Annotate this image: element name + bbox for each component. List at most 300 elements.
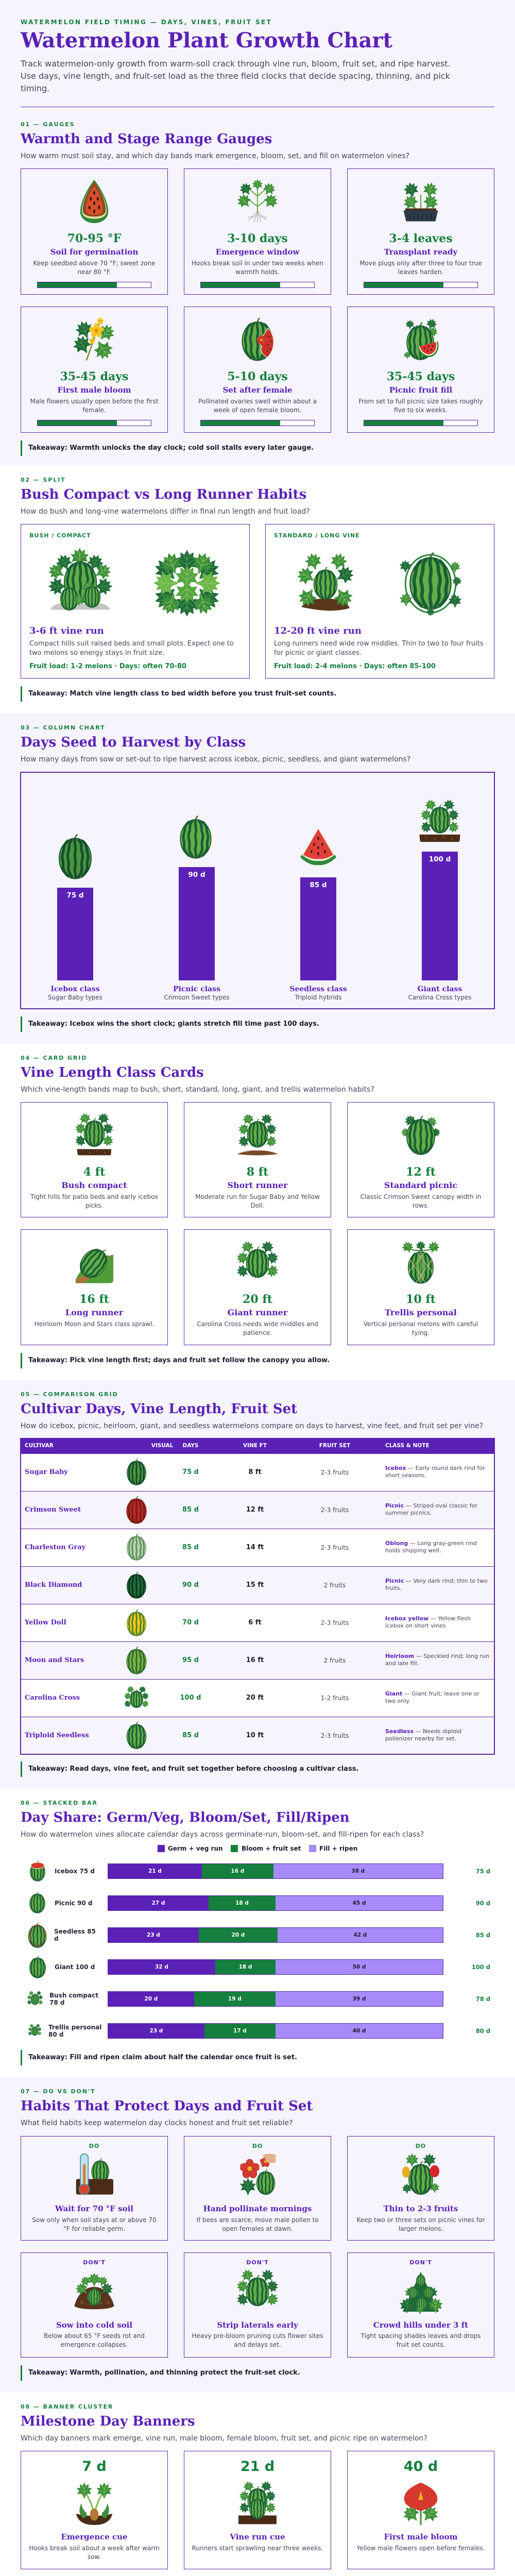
takeaway: Takeaway: Warmth unlocks the day clock; cold soil stalls every later gauge. (28, 444, 314, 452)
banner: 7 d (21, 2451, 168, 2569)
name: Standard picnic (384, 1180, 457, 1190)
section heading: 07 — DO VS DON'T (21, 2088, 96, 2095)
tag: DON'T (409, 2259, 432, 2266)
label: Emergence window (216, 247, 299, 257)
description: larger melons. (399, 2225, 443, 2232)
description (358, 398, 483, 414)
section heading: 03 — COLUMN CHART (21, 724, 105, 731)
section heading: Vine Length Class Cards (21, 1065, 204, 1080)
icon: melon and slice (404, 318, 439, 360)
label: Set after female (222, 385, 293, 395)
thumbnail (123, 1686, 150, 1711)
thumbnail (124, 1722, 149, 1749)
stacked row: Bush: 78 d (49, 1999, 64, 2006)
tag: BUSH / COMPACT (29, 532, 91, 539)
row: Sugar Baby (21, 1454, 494, 1492)
legend: Bloom + fruit set (242, 1845, 301, 1852)
stacked row: Bush: 20 d (144, 1996, 158, 2002)
tag: DON'T (83, 2259, 106, 2266)
icon: oval melon in vine ring (400, 552, 461, 616)
row: Yellow Doll: 70 d (182, 1619, 199, 1626)
name: Trellis personal (385, 1308, 457, 1317)
description: Keep seedbed above 70 °F; sweet zone (33, 260, 155, 267)
fruit load: Fruit load: 1-2 melons · Days: often 70-80 (29, 663, 186, 670)
section heading (21, 724, 410, 764)
gauge card: soil (21, 168, 168, 295)
description: five to six weeks. (394, 406, 448, 414)
row: Black Diamond: 15 ft (246, 1581, 264, 1589)
value: 3-4 leaves (389, 232, 453, 245)
row: Moon and Stars: 2 fruits (324, 1657, 346, 1664)
section heading: 04 — CARD GRID (21, 1055, 87, 1061)
value: 3-10 days (227, 232, 288, 245)
thumbnail: oval melon (27, 1892, 47, 1913)
intro text: timing. (21, 83, 49, 93)
section heading: Habits That Protect Days and Fruit Set (21, 2098, 313, 2114)
bar (179, 867, 215, 980)
icon: crowded pile (399, 2270, 442, 2315)
row: Yellow Doll: icebox on short vines. (385, 1622, 448, 1629)
thumbnail: bush melon (25, 1991, 45, 2007)
day number: 7 d (82, 2459, 107, 2475)
icon: potted transplant (403, 182, 438, 222)
description (29, 640, 234, 657)
row: Sugar Baby: Sugar Baby (25, 1468, 68, 1476)
icon: giant vine melon (237, 1241, 278, 1278)
title: Emergence cue (61, 2532, 128, 2541)
row: Sugar Baby: Icebox — Early round dark rind for (385, 1465, 485, 1471)
value: 35-45 days (387, 370, 455, 383)
icon: melon on slope (75, 1249, 113, 1283)
panel: bush compact (21, 524, 250, 679)
row: Yellow Doll: Icebox yellow — Yellow flesh (385, 1615, 471, 1622)
section 01: gauges (0, 110, 515, 466)
stacked row: Seedless (21, 1923, 494, 1947)
title: Hand pollinate mornings (203, 2204, 312, 2213)
row: Carolina Cross: Carolina Cross (25, 1694, 80, 1702)
gauge card: picnic fill (347, 307, 494, 433)
description: Classic Crimson Sweet canopy width in (360, 1193, 481, 1200)
section heading: 06 — STACKED BAR (21, 1800, 98, 1806)
section 02: split (0, 466, 515, 714)
card: 8 ft (184, 1102, 331, 1217)
icon: sprout in soil (73, 2482, 116, 2525)
bar: 100 d (429, 855, 451, 863)
table header (20, 1438, 495, 1454)
stacked row: Picnic (21, 1891, 494, 1915)
description: female. (82, 406, 106, 414)
row: Moon and Stars (21, 1642, 494, 1680)
stacked row: Icebox: 75 d (476, 1868, 490, 1875)
thumbnail (124, 1459, 149, 1485)
stacked row: Picnic: 27 d (152, 1900, 165, 1906)
column: seedless (289, 829, 347, 1001)
description: Tight hills for patio beds and early icebox (30, 1193, 158, 1200)
gauge bar (37, 282, 151, 288)
icon: long vine on soil (297, 553, 354, 611)
row: Crimson Sweet: 2-3 fruits (321, 1506, 349, 1514)
section heading (21, 1391, 494, 1432)
icon: bush plant with melons (48, 548, 112, 611)
description (348, 2332, 494, 2349)
icon: melon (59, 834, 92, 879)
icon: thermometer and melon (73, 2153, 116, 2196)
stacked row: Trellis: 80 d (476, 2027, 490, 2035)
banner: 21 d (184, 2451, 331, 2569)
description: Male flowers usually open before the first (30, 398, 158, 405)
stacked row: Bush: Bush compact (49, 1992, 98, 1999)
stacked row: Seedless: 42 d (353, 1932, 367, 1938)
row: Black Diamond: fruits. (385, 1585, 402, 1591)
row: Triploid Seedless: Seedless — Needs diploid (385, 1728, 461, 1735)
row: Moon and Stars: Moon and Stars (25, 1656, 84, 1664)
row: Crimson Sweet: summer picnics. (385, 1510, 432, 1516)
section heading (21, 1055, 374, 1094)
row: Moon and Stars: 95 d (182, 1656, 199, 1664)
card: thin fruits (347, 2136, 494, 2241)
class name: Icebox class (50, 985, 100, 993)
description (184, 2332, 331, 2349)
description: Yellow male flowers open before females. (356, 2545, 485, 2552)
card: 4 ft (21, 1102, 168, 1217)
description (360, 1193, 481, 1209)
gauge card: fruit set (184, 307, 331, 433)
takeaway: Takeaway: Fill and ripen claim about half the calendar once fruit is set. (28, 2054, 297, 2061)
card: hand pollinate (184, 2136, 331, 2241)
icon: red flower (399, 2482, 442, 2525)
stacked row: Icebox: 21 d (148, 1868, 162, 1874)
description (30, 1193, 158, 1209)
takeaway (21, 686, 494, 702)
stacked row: Trellis: 40 d (353, 2028, 366, 2034)
takeaway (21, 1761, 494, 1777)
stacked row: Giant: 32 d (155, 1964, 168, 1970)
description: Carolina Cross needs wide middles and (197, 1320, 318, 1328)
section heading: 01 — GAUGES (21, 121, 75, 128)
fruit load: Fruit load: 2-4 melons · Days: often 85-100 (274, 663, 436, 670)
gauge bar (364, 420, 478, 426)
description: two melons so energy stays in fruit size. (29, 649, 164, 657)
title: Crowd hills under 3 ft (373, 2320, 468, 2330)
description: Vertical personal melons with careful (364, 1320, 478, 1328)
icon: runner on mulch (237, 1114, 278, 1155)
bar: 75 d (66, 891, 84, 900)
section heading: Bush Compact vs Long Runner Habits (21, 487, 306, 502)
icon: yellow flower vine (73, 317, 114, 361)
description (21, 2216, 167, 2233)
title: Watermelon Plant Growth Chart (21, 28, 392, 53)
icon: melon with small fruits (399, 2153, 442, 2196)
takeaway (21, 440, 494, 456)
tag: DO (89, 2143, 99, 2149)
stacked row: Icebox: 38 d (351, 1868, 365, 1874)
section heading: How do bush and long-vine watermelons differ in final run length and fruit load? (21, 507, 310, 516)
stacked row: Giant: 50 d (353, 1964, 366, 1970)
row: Charleston Gray (21, 1529, 494, 1567)
row: Carolina Cross: 100 d (180, 1694, 201, 1702)
column chart (20, 772, 495, 1009)
legend (158, 1845, 358, 1852)
bar: 85 d (310, 881, 327, 889)
description (30, 398, 159, 414)
section heading (21, 477, 310, 516)
gauge bar (364, 282, 478, 288)
description: Long runners need wide row middles. Thin to two to four fruits (274, 640, 484, 648)
description: Move plugs only after three to four true (359, 260, 482, 267)
section heading: Warmth and Stage Range Gauges (21, 131, 272, 147)
value: 70-95 °F (67, 232, 121, 245)
card: cold soil (21, 2252, 168, 2358)
intro text: Use days, vine length, and fruit-set load as the three field clocks that decide spacing, thinning, and pick (21, 71, 450, 81)
takeaway: Takeaway: Icebox wins the short clock; giants stretch fill time past 100 days. (28, 1020, 319, 1028)
icon: wedge slice (300, 829, 336, 866)
stacked row: Giant: 18 d (239, 1964, 252, 1970)
value: 16 ft (79, 1293, 109, 1306)
stacked row: Trellis (21, 2019, 494, 2043)
stacked row: Picnic: 18 d (235, 1900, 249, 1906)
stacked row: Bush (21, 1987, 494, 2011)
takeaway (21, 1016, 494, 1032)
label: First male bloom (58, 385, 131, 395)
value: 8 ft (247, 1165, 268, 1179)
title: Strip laterals early (217, 2320, 298, 2330)
stacked row: Bush: 39 d (353, 1996, 366, 2002)
description (21, 2544, 167, 2562)
bar (300, 877, 336, 980)
row: Black Diamond: Picnic — Very dark rind; thin to two (385, 1578, 488, 1584)
column: giant (408, 800, 471, 1001)
section heading: How do watermelon vines allocate calendar days across germinate-run, bloom-set, and fill-ripen for each class? (21, 1831, 424, 1839)
row: Carolina Cross: 1-2 fruits (321, 1694, 349, 1702)
table header: VISUAL (151, 1443, 173, 1449)
description (198, 398, 317, 414)
description (195, 1193, 320, 1209)
row: Moon and Stars: and late fill. (385, 1660, 419, 1667)
icon: leaf rosette (153, 550, 220, 617)
card: 20 ft (184, 1229, 331, 1345)
section heading: Cultivar Days, Vine Length, Fruit Set (21, 1401, 297, 1417)
takeaway (21, 2050, 494, 2065)
stacked row: Picnic: 90 d (476, 1900, 490, 1907)
section heading: Which day banners mark emerge, vine run, male bloom, female bloom, fruit set, and picnic ripe on watermelon? (21, 2434, 427, 2443)
name: Long runner (65, 1308, 123, 1317)
thumbnail: topped melon (27, 1860, 48, 1882)
row: Charleston Gray: 14 ft (246, 1544, 264, 1551)
row: Charleston Gray: Charleston Gray (25, 1544, 85, 1551)
description (348, 2216, 494, 2233)
legend: Fill + ripen (319, 1845, 357, 1852)
day number: 40 d (404, 2459, 438, 2475)
tag: DO (252, 2143, 263, 2149)
stacked row: Picnic: Picnic 90 d (55, 1900, 92, 1907)
icon: melon with top leaves (401, 1115, 440, 1155)
value: 3-6 ft vine run (29, 625, 104, 636)
label: Transplant ready (384, 247, 457, 257)
table header: CLASS & NOTE (385, 1443, 430, 1449)
subtype: Sugar Baby types (48, 994, 102, 1001)
description: week of open female bloom. (214, 406, 301, 414)
row: Charleston Gray: Oblong — Long gray-green rind (385, 1540, 477, 1547)
stacked row: Seedless: d (54, 1935, 59, 1942)
stacked row: Trellis: 23 d (150, 2028, 163, 2034)
icon: seed slice (80, 180, 108, 223)
row: Triploid Seedless (21, 1717, 494, 1754)
class name: Picnic class (173, 985, 220, 993)
class name: Giant class (418, 985, 462, 993)
row: Black Diamond: Black Diamond (25, 1581, 82, 1589)
row: Black Diamond: 2 fruits (324, 1582, 346, 1589)
row: Carolina Cross: two only. (385, 1698, 410, 1704)
title: Sow into cold soil (56, 2320, 132, 2330)
description (359, 260, 482, 276)
gauge bar (200, 420, 315, 426)
row: Yellow Doll: 6 ft (248, 1619, 262, 1626)
description: and delays set. (234, 2341, 281, 2348)
stacked row: Giant (21, 1955, 494, 1979)
label: Soil for germination (50, 247, 138, 257)
thumbnail (124, 1534, 149, 1561)
description (274, 640, 484, 657)
takeaway: Takeaway: Match vine length class to bed width before you trust fruit-set counts. (28, 690, 336, 698)
description (21, 2332, 167, 2349)
row: Triploid Seedless: 10 ft (246, 1732, 264, 1739)
comparison table (20, 1438, 495, 1755)
icon: cut melon (242, 318, 274, 361)
row: Sugar Baby: 8 ft (248, 1468, 262, 1476)
section heading: How do icebox, picnic, heirloom, giant, and seedless watermelons compare on days to harvest, vine feet, and fruit set per vine? (21, 1422, 483, 1430)
stacked row: Giant: 100 d (472, 1963, 490, 1971)
tag: DO (416, 2143, 426, 2149)
stacked row: Giant: Giant 100 d (55, 1963, 95, 1971)
takeaway: Takeaway: Read days, vine feet, and fruit set together before choosing a cultivar class. (28, 1765, 358, 1773)
bar (57, 888, 93, 980)
name: Giant runner (228, 1308, 287, 1317)
description: Compact hills suit raised beds and small plots. Expect one to (29, 640, 234, 648)
gauge bar (200, 282, 315, 288)
row: Carolina Cross: Giant — Giant fruit; leave one or (385, 1690, 479, 1697)
description: near 80 °F. (78, 268, 111, 276)
value: 12-20 ft vine run (274, 625, 362, 636)
gauge card: male bloom (21, 307, 168, 433)
eyebrow: WATERMELON FIELD TIMING — DAYS, VINES, FRUIT SET (21, 19, 272, 26)
gauge card: transplant (347, 168, 494, 295)
value: 35-45 days (60, 370, 128, 383)
thumbnail (126, 1609, 147, 1636)
stacked row: Trellis: Trellis personal (48, 2024, 101, 2031)
column: picnic (164, 816, 230, 1001)
section heading: Day Share: Germ/Veg, Bloom/Set, Fill/Ripen (21, 1810, 350, 1825)
icon: trellis net melon (399, 1241, 442, 1284)
description: emergence collapses. (61, 2341, 128, 2348)
description: tying. (412, 1329, 430, 1336)
icon: hand pollinating (236, 2153, 279, 2196)
class name: Seedless class (289, 985, 347, 993)
tag: STANDARD / LONG VINE (274, 532, 360, 539)
section heading (21, 2403, 494, 2444)
row: Moon and Stars: 16 ft (246, 1656, 264, 1664)
icon: oval melon (180, 816, 212, 858)
section heading: How many days from sow or set-out to ripe harvest across icebox, picnic, seedless, and giant watermelons? (21, 755, 410, 764)
description: patience. (243, 1329, 272, 1336)
subtype: Carolina Cross types (408, 994, 471, 1001)
icon: vine melon (236, 2269, 279, 2312)
bar (422, 852, 458, 980)
row: Charleston Gray: holds shipping well. (385, 1547, 441, 1554)
row: Charleston Gray: 85 d (182, 1544, 199, 1551)
value: 4 ft (83, 1165, 105, 1179)
section heading: 08 — BANNER CLUSTER (21, 2403, 113, 2410)
description: From set to full picnic size takes roughly (358, 398, 483, 405)
row: Crimson Sweet: 12 ft (246, 1506, 264, 1514)
column: icebox (48, 834, 102, 1001)
section heading: Milestone Day Banners (21, 2414, 195, 2429)
panel: standard long vine (265, 524, 494, 679)
page header (0, 0, 515, 110)
description: Hooks break soil about a week after warm (29, 2545, 160, 2552)
row: Black Diamond (21, 1567, 494, 1604)
row: Carolina Cross (21, 1680, 494, 1717)
stacked row: Icebox (21, 1859, 494, 1883)
stacked row: Bush: 19 d (228, 1996, 242, 2002)
section heading: 05 — COMPARISON GRID (21, 1391, 118, 1398)
row: Crimson Sweet: Picnic — Striped oval classic for (385, 1502, 477, 1509)
value: 12 ft (406, 1165, 436, 1179)
value: 20 ft (243, 1293, 272, 1306)
section 04: card grid (0, 1044, 515, 1380)
stacked row: Picnic: 45 d (353, 1900, 366, 1906)
row: Moon and Stars: Heirloom — Speckled rind; long run (385, 1653, 489, 1659)
card: strip laterals (184, 2252, 331, 2358)
takeaway: Takeaway: Warmth, pollination, and thinning protect the fruit-set clock. (28, 2369, 300, 2377)
label: Picnic fruit fill (389, 385, 452, 395)
intro text (21, 59, 451, 93)
value: 10 ft (406, 1293, 436, 1306)
description: Tight spacing shades leaves and drops (360, 2332, 481, 2340)
stacked row: Icebox: 16 d (231, 1868, 244, 1874)
section 08: banner cluster (0, 2393, 515, 2576)
card: 12 ft (347, 1102, 494, 1217)
row: Carolina Cross: 20 ft (246, 1694, 264, 1702)
description (192, 260, 323, 276)
section heading (21, 121, 409, 160)
takeaway (21, 2365, 494, 2381)
section heading: 02 — SPLIT (21, 477, 66, 483)
description: Keep two or three sets on picnic vines for (357, 2216, 485, 2224)
section heading: How warm must soil stay, and which day bands mark emergence, bloom, set, and fill on watermelon vines? (21, 152, 409, 160)
card: wait for warm soil (21, 2136, 168, 2241)
tag: DON'T (246, 2259, 269, 2266)
description: Doll. (250, 1202, 265, 1209)
row: Yellow Doll (21, 1604, 494, 1642)
row: Charleston Gray: 2-3 fruits (321, 1544, 349, 1551)
section heading: Which vine-length bands map to bush, short, standard, long, giant, and trellis watermelon habits? (21, 1086, 374, 1094)
row: Triploid Seedless: pollenizer nearby for set. (385, 1735, 456, 1742)
table header: FRUIT SET (319, 1443, 350, 1449)
icon: giant melon on soil (419, 800, 460, 842)
description: warmth holds. (235, 268, 280, 276)
card: crowd hills (347, 2252, 494, 2358)
intro text: Track watermelon-only growth from warm-soil crack through vine run, bloom, fruit set, and ripe harvest. (21, 59, 451, 69)
card: 16 ft (21, 1229, 168, 1345)
stacked row: Trellis: 17 d (233, 2028, 247, 2034)
description: for picnic or giant classes. (274, 649, 362, 657)
bar: 90 d (188, 871, 205, 879)
table header: VINE FT (243, 1443, 267, 1449)
takeaway: Takeaway: Pick vine length first; days and fruit set follow the canopy you allow. (28, 1357, 330, 1364)
row: Crimson Sweet (21, 1492, 494, 1529)
section heading: What field habits keep watermelon day clocks honest and fruit set reliable? (21, 2119, 293, 2127)
section 07: do vs don't (0, 2077, 515, 2393)
